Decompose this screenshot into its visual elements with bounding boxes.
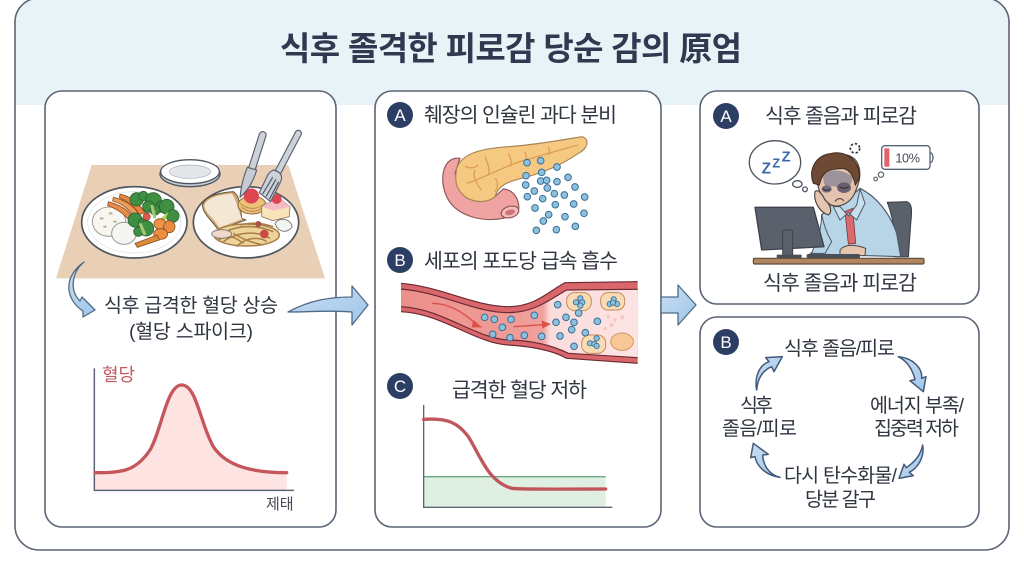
illustration: tired worker at computer: Z (762, 160, 771, 177)
illustration: tired worker at computer: 10% (895, 152, 920, 166)
left plate food (92, 207, 126, 236)
cycle step: drowsiness left (722, 395, 797, 440)
cycle step: craving (784, 465, 898, 511)
badge C: C (394, 377, 406, 396)
title: 식후 졸격한 피로감 당순 감의 原엄 (280, 30, 742, 67)
cycle step: craving: 다시 탄수화물/ (784, 465, 898, 487)
arrow: from meal down to text (69, 262, 95, 317)
cycle step: low energy: 에너지 부족/ (870, 395, 965, 417)
caption: 식후 졸음과 피로감 (763, 272, 917, 295)
panel: mechanism (375, 91, 661, 527)
panel: sleepy worker (700, 91, 979, 304)
panel frame (45, 91, 336, 527)
cycle step: low energy: 집중력 저하 (874, 418, 959, 440)
cycle arrows (751, 357, 926, 478)
badge A: A (394, 106, 406, 125)
illustration: tired worker at computer: Z (772, 156, 780, 170)
badge A: A (720, 107, 732, 126)
heading C: 급격한 혈당 저하 (452, 379, 587, 402)
chart: blood glucose spike (94, 368, 294, 490)
illustration: tired worker at computer: Z (782, 150, 791, 166)
right plate food (202, 192, 246, 230)
arrow: panel 2 to panel 3 (661, 285, 696, 325)
badge B (387, 247, 413, 273)
badge A (713, 103, 739, 129)
chart: blood sugar drop (424, 405, 612, 507)
arrow: panel 1 to panel 2 (288, 286, 368, 325)
chart label: time: 제태 (266, 496, 294, 513)
illustration: blood vessel and cells (401, 282, 638, 363)
heading B: 세포의 포도당 급속 흡수 (424, 250, 618, 273)
cycle step: craving: 당분 갈구 (805, 489, 876, 511)
knife (251, 135, 263, 173)
illustration: meal on a table mat (56, 133, 325, 278)
text: blood sugar rise (104, 295, 278, 343)
illustration: pancreas releasing insulin (443, 137, 588, 234)
panel frame (375, 91, 661, 527)
chart label: blood sugar: 혈당 (102, 365, 135, 385)
panel: vicious cycle (700, 317, 979, 527)
cycle step: drowsiness top: 식후 졸음/피로 (784, 338, 895, 360)
badge B: B (394, 251, 406, 270)
panel frame (700, 91, 979, 304)
cycle step: drowsiness left: 졸음/피로 (722, 418, 797, 440)
heading A: 췌장의 인슐린 과다 분비 (424, 104, 617, 127)
text: blood sugar rise: (혈당 스파이크) (129, 321, 253, 343)
badge B (713, 329, 739, 355)
cycle step: drowsiness left: 식후 (740, 395, 773, 417)
heading: 식후 졸음과 피로감 (765, 105, 917, 128)
cycle step: low energy (870, 395, 965, 440)
panel: meal and blood sugar spike (45, 91, 336, 527)
fork (277, 133, 298, 173)
illustration: tired worker at computer (749, 141, 933, 264)
panel frame (700, 317, 979, 527)
text: blood sugar rise: 식후 급격한 혈당 상승 (104, 295, 278, 317)
badge B: B (720, 333, 732, 352)
badge A (387, 102, 413, 128)
badge C (387, 373, 413, 399)
